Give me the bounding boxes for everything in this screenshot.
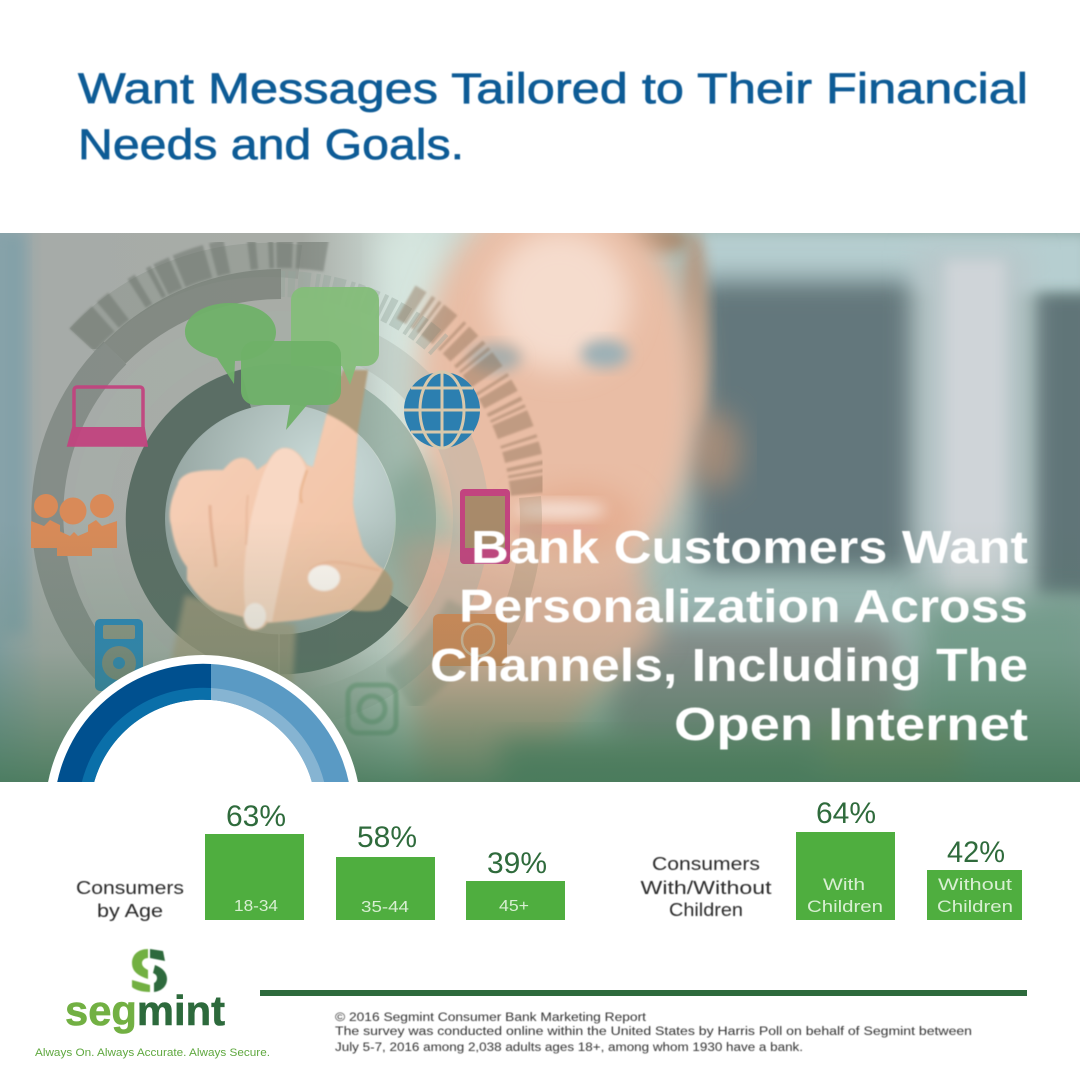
label: consumers with/without children: Consumers xyxy=(652,854,760,874)
fingernail: thumb xyxy=(308,565,340,591)
laptop icon xyxy=(69,387,146,445)
photo headline xyxy=(430,521,1028,750)
woman: blurred portrait xyxy=(400,190,962,800)
bar with children: With xyxy=(823,875,865,894)
camera icon: faded green xyxy=(348,685,396,733)
fingernail: index xyxy=(244,603,266,629)
bar chart: age xyxy=(205,800,565,920)
title: Want Messages Tailored to Their Financial xyxy=(78,65,1028,113)
label: consumers by age xyxy=(76,878,184,921)
photo headline: Personalization Across xyxy=(459,580,1028,632)
bar 45+: 39% xyxy=(487,847,547,880)
bar with children: 64% xyxy=(816,797,876,830)
globe icon xyxy=(404,372,480,448)
bar 18-34 xyxy=(205,800,304,920)
photo headline: Channels, Including The xyxy=(430,639,1028,691)
bar 35-44: 58% xyxy=(357,821,417,854)
label: consumers with/without children: With/Without xyxy=(640,878,772,898)
speech bubbles icon xyxy=(185,287,379,430)
photo backdrop xyxy=(0,233,1080,800)
bar without children: 42% xyxy=(947,836,1005,869)
logo: segmint xyxy=(35,949,270,1059)
bar without children: Without xyxy=(938,875,1012,894)
bar with children xyxy=(796,797,895,920)
footer rule xyxy=(260,990,1027,996)
photo headline: Bank Customers Want xyxy=(471,521,1028,573)
phone icon xyxy=(460,489,510,564)
wrist shadow xyxy=(170,594,298,683)
bottom green fade xyxy=(0,551,1080,782)
bar without children: Children xyxy=(937,897,1013,916)
source note xyxy=(335,1012,972,1054)
label: consumers with/without children: Children xyxy=(669,900,743,920)
bar with children: Children xyxy=(807,897,883,916)
people icon xyxy=(31,494,117,556)
bar 45+ xyxy=(466,847,565,920)
donut chart xyxy=(48,655,358,782)
glass circle xyxy=(165,404,395,634)
technology rings xyxy=(47,251,531,740)
hand xyxy=(170,370,393,630)
label: consumers by age: by Age xyxy=(97,901,163,921)
title: Needs and Goals. xyxy=(78,121,464,169)
source note: July 5-7, 2016 among 2,038 adults ages 18+, among whom 1930 have a bank. xyxy=(335,1042,803,1054)
photo headline: Open Internet xyxy=(674,698,1028,750)
logo mark: S xyxy=(132,949,167,992)
label: consumers with/without children xyxy=(640,854,772,920)
source note: The survey was conducted online within the United States by Harris Poll on behalf of Segmint between xyxy=(335,1026,972,1038)
logo tagline: Always On. Always Accurate. Always Secure. xyxy=(35,1047,270,1059)
source note: © 2016 Segmint Consumer Bank Marketing Report xyxy=(335,1012,647,1024)
bar without children xyxy=(927,836,1022,920)
music player icon xyxy=(95,619,143,691)
hero photo panel xyxy=(0,233,1080,782)
logo wordmark: segmint xyxy=(65,987,225,1034)
bar 35-44 xyxy=(336,821,435,920)
bar 35-44: 35-44 xyxy=(361,899,409,916)
bar 18-34: 18-34 xyxy=(234,898,278,915)
camera icon: orange xyxy=(433,614,507,666)
bar 45+: 45+ xyxy=(499,898,529,915)
bar 18-34: 63% xyxy=(226,800,286,833)
label: consumers by age: Consumers xyxy=(76,878,184,898)
title xyxy=(78,65,1028,169)
bar chart: children xyxy=(796,797,1022,920)
